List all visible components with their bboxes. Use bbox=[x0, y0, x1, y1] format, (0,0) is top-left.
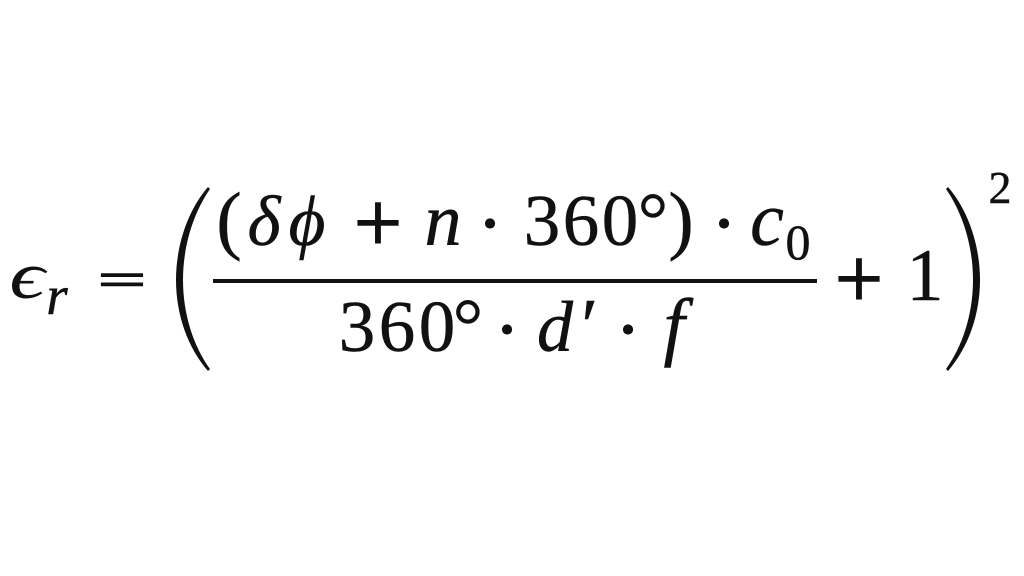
denominator: f bbox=[663, 284, 693, 368]
denominator: ′ bbox=[577, 284, 595, 368]
fraction bar bbox=[213, 279, 817, 283]
left large parenthesis bbox=[176, 187, 210, 371]
numerator: 360 bbox=[524, 180, 638, 261]
equals sign: = bbox=[98, 254, 146, 305]
exponent 2: 2 bbox=[988, 162, 1012, 213]
numerator: · bbox=[477, 182, 503, 266]
numerator: ° bbox=[638, 178, 668, 262]
denominator: · bbox=[615, 288, 641, 372]
denominator: 360 bbox=[339, 286, 455, 367]
left-hand side: epsilon r: ϵ bbox=[9, 239, 48, 313]
left-hand side: epsilon r bbox=[9, 239, 68, 326]
denominator: ° bbox=[453, 284, 483, 368]
left-hand side: epsilon r: r bbox=[46, 265, 68, 326]
numerator: · bbox=[711, 182, 737, 266]
numerator: c bbox=[750, 178, 784, 262]
numerator: 0 bbox=[786, 214, 810, 270]
denominator: · bbox=[494, 288, 520, 372]
plus one: + bbox=[835, 232, 883, 326]
numerator: ϕ bbox=[289, 183, 325, 261]
denominator: d bbox=[537, 287, 574, 367]
numerator: n bbox=[424, 180, 462, 262]
right large parenthesis bbox=[946, 187, 980, 371]
numerator: δ bbox=[247, 183, 281, 261]
numerator: ) bbox=[668, 178, 694, 262]
numerator: ( bbox=[216, 178, 242, 262]
plus one: 1 bbox=[906, 235, 944, 317]
numerator: + bbox=[354, 176, 402, 270]
